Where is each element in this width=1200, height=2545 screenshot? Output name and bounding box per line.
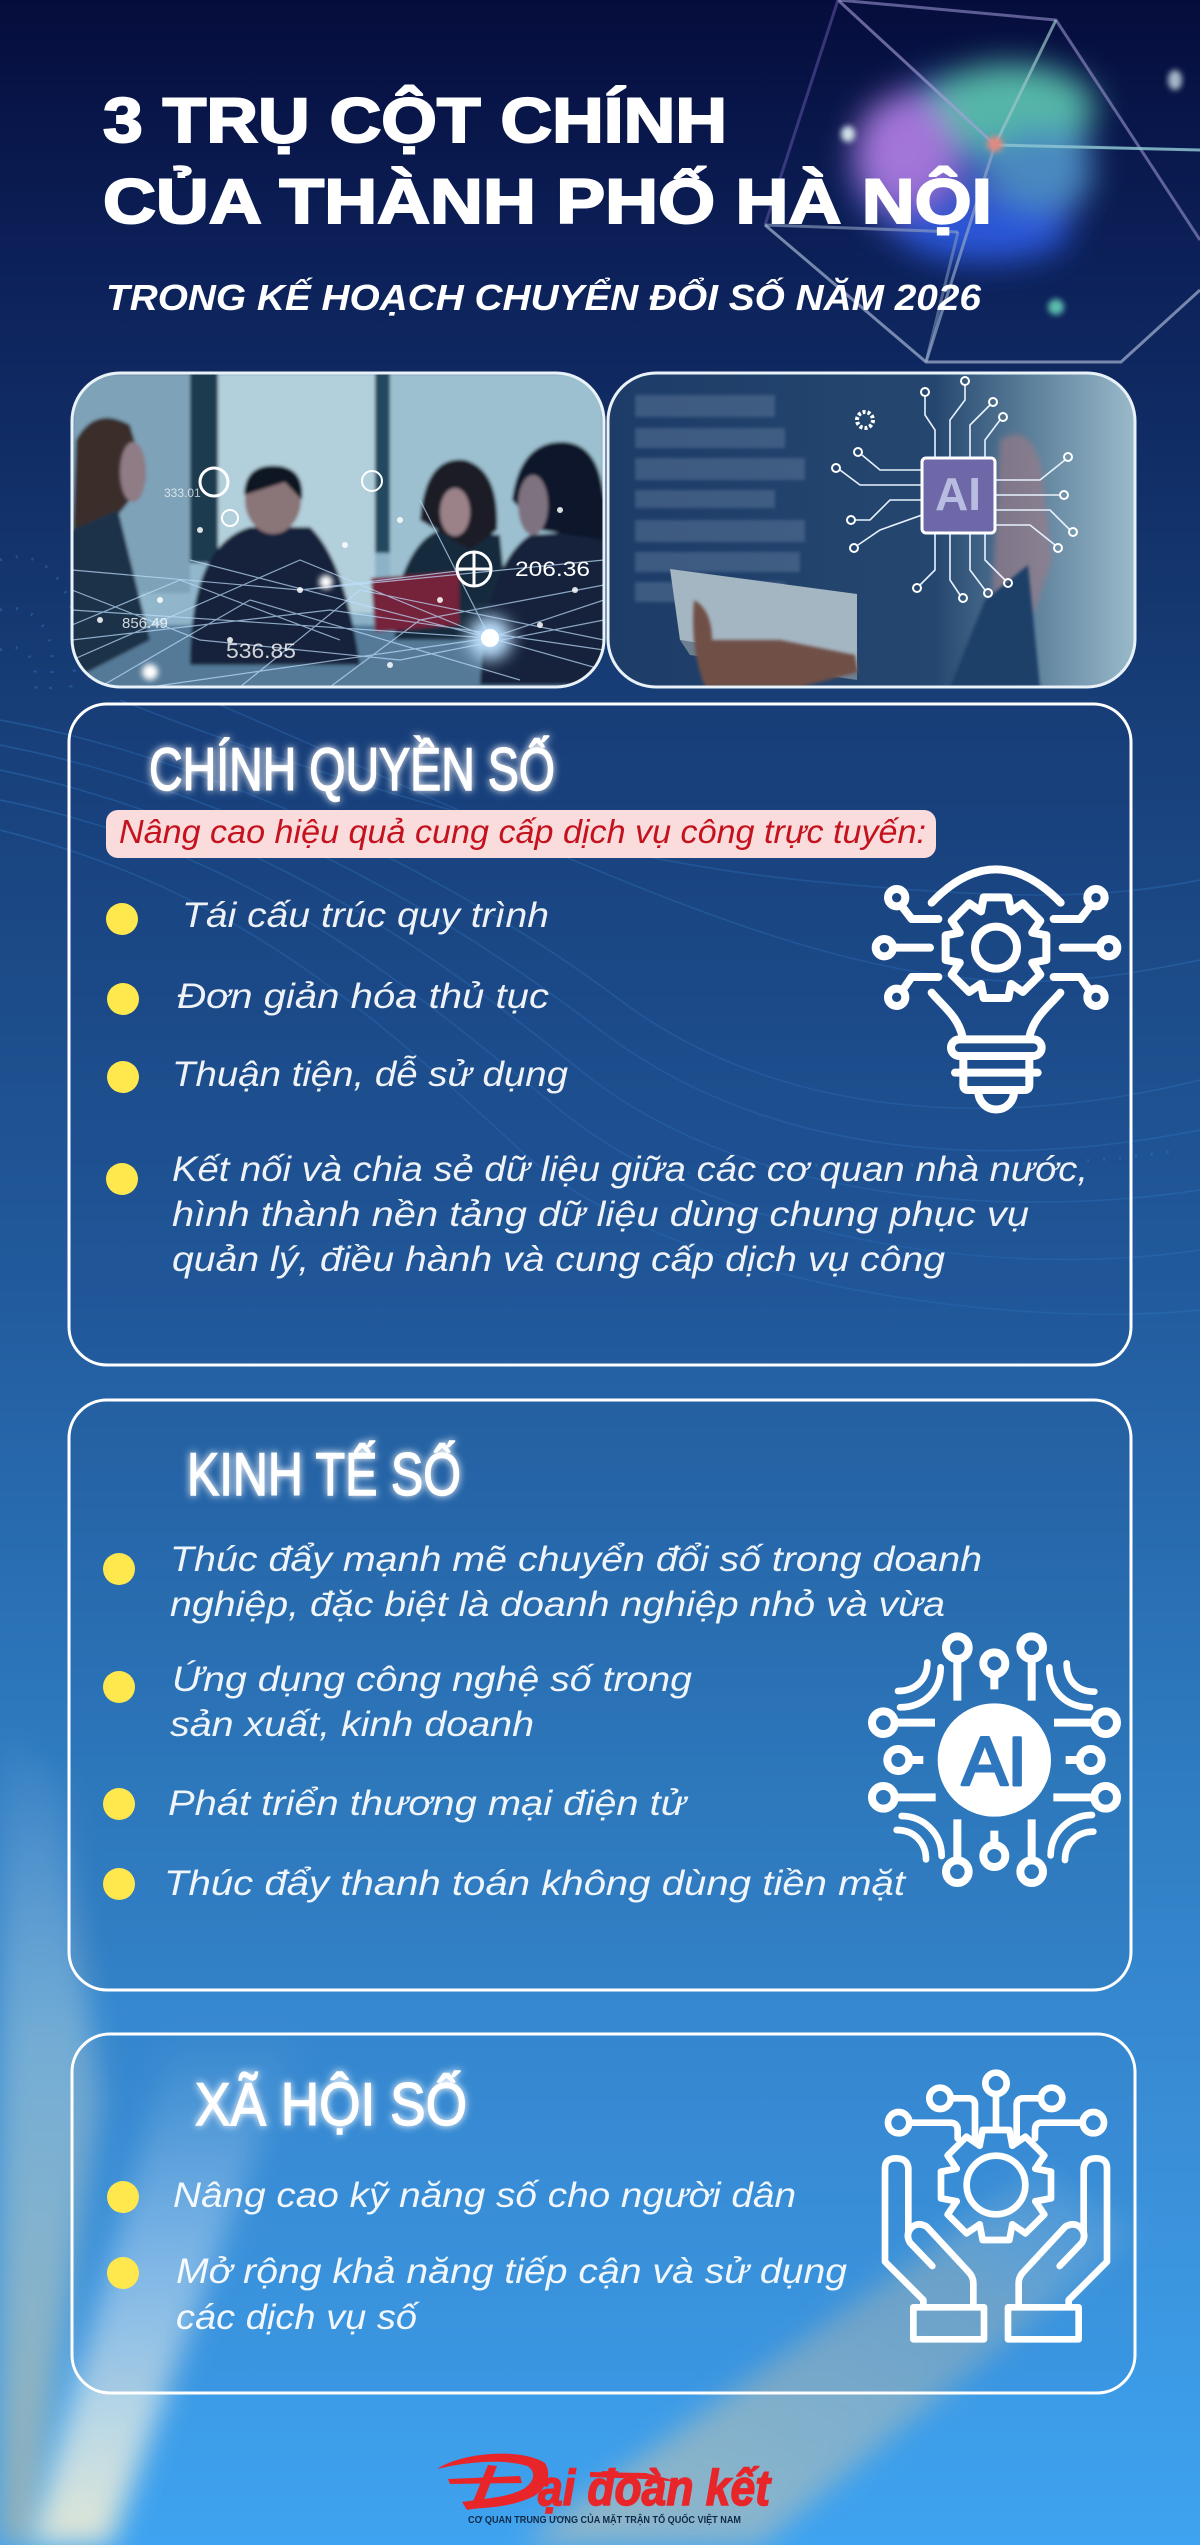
photo: team meeting with data overlay: 536.85 [226,640,296,663]
photo: AI chip and tablet [608,373,1135,687]
bullet list: Kinh tế số [103,1540,982,1903]
tablet and hand [670,569,857,670]
photo: team meeting with data overlay [72,373,604,690]
icon: AI circuit: AI [962,1723,1027,1800]
title [103,85,992,237]
centre man [190,527,360,665]
gear glyph [857,412,873,428]
overlay icons [200,468,491,586]
icon: hands holding gear [885,2073,1107,2339]
data bars [635,395,805,602]
right man [480,530,604,685]
bullet list: Kinh tế số: nghiệp, đặc biệt là doanh nghiệp nhỏ và vừa [170,1585,945,1624]
heading: Kinh tế số: KINH TẾ SỐ [187,1441,461,1508]
laptop [371,572,459,632]
photo: AI chip and tablet: AI [935,468,981,520]
photo: team meeting with data overlay: 856.49 [122,615,168,632]
chip [922,458,995,533]
bullet list: Xã hội số [107,2176,848,2337]
arm and hand behind chip [990,434,1052,640]
bullet list: Chính quyền số [106,896,1088,1279]
title: CỦA THÀNH PHỐ HÀ NỘI [103,166,992,237]
logo tagline: CƠ QUAN TRUNG ƯƠNG CỦA MẶT TRẬN TỔ QUỐC VIỆT NAM [468,2512,741,2526]
photo: team meeting with data overlay: 333.01 [164,486,201,500]
bullet list: Chính quyền số: Đơn giản hóa thủ tục [177,977,550,1016]
title: 3 TRỤ CỘT CHÍNH [103,85,727,156]
icon: light bulb with gear [876,869,1117,1109]
right woman [395,530,510,640]
bullet list: Chính quyền số: hình thành nền tảng dữ liệu dùng chung phục vụ [172,1195,1029,1234]
bullet list: Chính quyền số: Tái cấu trúc quy trình [182,896,549,935]
bullet list: Kinh tế số: sản xuất, kinh doanh [170,1705,534,1744]
bullet list: Kinh tế số: Ứng dụng công nghệ số trong [172,1660,693,1699]
photo: team meeting with data overlay: 206.36 [515,558,590,581]
logo: Đại đoàn kết: ại đoàn kết [538,2460,772,2516]
bullet list: Chính quyền số: Thuận tiện, dễ sử dụng [172,1055,569,1094]
panel: Xã hội số [72,2034,1135,2393]
bullet list: Kinh tế số: Phát triển thương mại điện tử [168,1784,689,1823]
left woman [74,416,136,532]
circuit lines [840,385,1070,595]
bullet list: Xã hội số: Mở rộng khả năng tiếp cận và sử dụng [176,2252,848,2291]
subtitle: TRONG KẾ HOẠCH CHUYỂN ĐỔI SỐ NĂM 2026 [106,275,982,318]
bullet list: Chính quyền số: Kết nối và chia sẻ dữ liệu giữa các cơ quan nhà nước, [172,1150,1088,1189]
icon: AI circuit [872,1636,1117,1883]
callout: red subtitle pill: Nâng cao hiệu quả cung cấp dịch vụ công trực tuyến: [119,813,926,850]
decorative orb and cube [765,0,1200,362]
panel: Kinh tế số [69,1400,1131,1990]
bullet list: Kinh tế số: Thúc đẩy thanh toán không dùng tiền mặt [164,1864,906,1903]
logo: Đại đoàn kết [437,2454,772,2526]
heading: Xã hội số: XÃ HỘI SỐ [195,2071,467,2138]
network lines [72,500,604,687]
panel: Chính quyền số [69,704,1131,1365]
bullet list: Chính quyền số: quản lý, điều hành và cung cấp dịch vụ công [172,1240,946,1279]
bullet list: Kinh tế số: Thúc đẩy mạnh mẽ chuyển đổi số trong doanh [170,1540,982,1579]
heading: Chính quyền số: CHÍNH QUYỀN SỐ [149,736,555,803]
bullet list: Xã hội số: Nâng cao kỹ năng số cho người dân [173,2176,796,2215]
bullet list: Xã hội số: các dịch vụ số [176,2298,420,2337]
